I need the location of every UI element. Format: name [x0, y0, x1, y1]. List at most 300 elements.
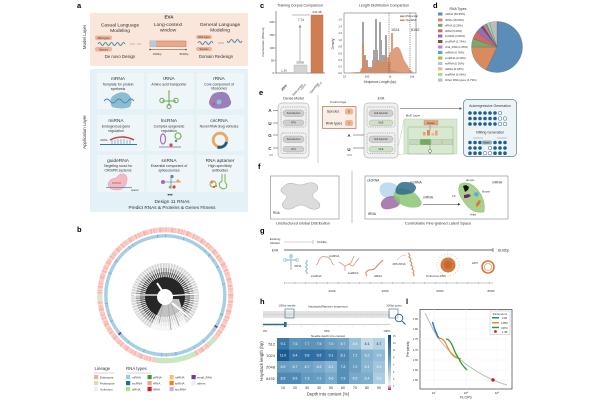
legend: RNA types: snRNA	[175, 382, 185, 386]
icon labels: HPV	[472, 261, 478, 265]
heatmap: 6.1	[365, 365, 369, 369]
generation panel: Infilling Generation	[476, 130, 504, 134]
EVA model diagram: EVA	[378, 96, 385, 100]
long-context window: window	[160, 28, 177, 34]
heatmap: 50	[329, 386, 333, 390]
panel label g: g	[260, 226, 265, 235]
EVA row: EVA	[272, 248, 279, 252]
heatmap: 6.7	[293, 365, 297, 369]
legend: RNA types: piRNA	[153, 376, 162, 380]
controllable latent space box: Human	[466, 178, 475, 182]
EVA model diagram: Self-Attention	[374, 112, 389, 115]
panel e: model architecture	[259, 88, 516, 163]
controllable latent space box: circRNA	[367, 178, 380, 182]
application layer panel	[90, 69, 248, 212]
card: miRNA	[100, 118, 137, 144]
long-context window: Long-context	[154, 22, 183, 28]
general language modeling: Species	[200, 48, 209, 51]
bar chart: training corpus comparison: v23.0	[299, 83, 307, 91]
heatmap: 5.9	[377, 354, 381, 358]
length axis: 6000	[437, 289, 444, 293]
panel c: corpus and length comparison	[260, 1, 419, 97]
card: RNA aptamer	[206, 158, 235, 189]
legend: Parameters	[493, 312, 508, 316]
MoE layer detail	[398, 114, 457, 155]
histogram: length distribution comparison: RNAcentral	[406, 15, 418, 18]
heatmap: 6.4	[365, 376, 369, 380]
existing models row: Models	[270, 241, 280, 245]
panel b: circular phylogeny	[77, 225, 231, 392]
panel label h: h	[260, 297, 265, 306]
bar chart: training corpus comparison: v15.0	[280, 84, 288, 92]
legend: circRNA (1.74%)	[445, 40, 466, 44]
histogram: length distribution comparison: 0.0	[338, 71, 343, 75]
bar chart: training corpus comparison: Training Corpus Comparison	[277, 4, 323, 8]
haystack schematic: 100bp query	[386, 304, 402, 308]
general language modeling: Modeling	[210, 28, 230, 34]
colorbar: 13	[393, 343, 396, 345]
model layer side label: Model Layer	[82, 24, 87, 49]
heatmap: 7.7	[305, 342, 309, 346]
poliovirus	[437, 254, 459, 276]
heatmap: 80	[365, 386, 369, 390]
length axis: 2000	[329, 289, 336, 293]
controllable latent space box	[365, 176, 508, 226]
HPV ring	[482, 261, 494, 273]
legend: lineage: Prokaryote	[100, 382, 115, 386]
legend: RNA Types	[450, 7, 467, 11]
histogram: length distribution comparison: Sequence Length (bp)	[364, 80, 396, 84]
card: guideRNA: Targeting scout for	[104, 164, 133, 168]
heatmap: 5.0	[377, 376, 381, 380]
casual language modeling	[95, 22, 141, 59]
EVA model diagram: U	[347, 147, 351, 152]
existing models row: Existing	[270, 237, 281, 241]
heatmap: 7.0	[329, 342, 333, 346]
histogram: length distribution comparison: 1.4	[338, 24, 343, 28]
heatmap: 6.7	[341, 342, 345, 346]
histogram: length distribution comparison: 0.2	[338, 64, 343, 68]
legend: mRNA (56.96%)	[445, 12, 465, 16]
EVA model diagram: MoE	[379, 149, 384, 151]
dense model diagram: C	[268, 146, 272, 151]
dense model diagram: A	[268, 108, 272, 113]
control tags box: T	[348, 121, 350, 125]
bar chart: training corpus comparison: v1.0	[316, 81, 323, 88]
card: guideRNA: CRISPR systems	[104, 168, 132, 172]
card: guideRNA	[104, 158, 139, 192]
casual language modeling: RNA types	[98, 37, 110, 40]
length axis: 4000	[382, 289, 389, 293]
legend: miRNA (0.78%)	[445, 50, 464, 54]
card: circRNA: Novel RNA drug vehicles	[200, 124, 239, 128]
card backgrounds	[97, 73, 244, 192]
histogram: length distribution comparison: 10k	[410, 74, 415, 78]
dense model diagram: Dense Model	[283, 96, 304, 100]
legend: scaRNA (0.06%)	[445, 72, 466, 76]
bar chart: training corpus comparison: 0	[272, 71, 274, 75]
depth slider: 0%	[263, 329, 268, 333]
card: miRNA: miRNA	[108, 118, 124, 124]
icon labels: vtRNA	[374, 274, 382, 278]
colorbar	[388, 335, 396, 390]
legend: lineage: Unknown	[100, 388, 113, 392]
legend: snoRNA (0.39%)	[445, 56, 466, 60]
legend: Other RNA types (4.79%)	[445, 78, 477, 82]
bar chart: training corpus comparison: OpenRNA	[309, 82, 320, 94]
panel label a: a	[77, 1, 82, 10]
colorbar: 7	[393, 365, 395, 367]
panel label b: b	[77, 225, 82, 234]
controllable latent space box: tRNA	[368, 212, 377, 216]
histogram: length distribution comparison: 8192	[411, 28, 419, 32]
depth slider: 50%	[324, 329, 330, 333]
card: lncRNA: Complex epigenetic	[154, 124, 185, 128]
heatmap: 6.1	[329, 365, 333, 369]
divider	[317, 95, 319, 163]
panel l: perplexity vs FLOPs	[406, 297, 512, 400]
control tags box: Control tags	[330, 100, 347, 104]
existing models row: 1024bp	[317, 240, 327, 244]
card: tRNA: Amino acid transporter	[151, 82, 187, 86]
legend	[438, 7, 477, 82]
haystack schematic: 100bp needle	[279, 304, 296, 308]
MoE layer detail: Router	[427, 122, 435, 125]
legend: RNA types	[126, 366, 212, 392]
legend: RNA types: snoRNA	[175, 388, 186, 392]
heatmap: 8.5	[293, 376, 297, 380]
histogram: length distribution comparison: 1024	[391, 28, 399, 32]
infilling token rows	[470, 142, 510, 153]
legend	[490, 311, 510, 334]
controllable latent space box: mRNA	[492, 180, 503, 184]
arrow	[423, 203, 458, 205]
generation panel: Autoregressive Generation	[469, 104, 511, 108]
series 1.4B point	[491, 378, 495, 382]
heatmap: 7.2	[317, 376, 321, 380]
bar chart: training corpus comparison: 1.26	[281, 68, 287, 72]
heatmap	[259, 334, 385, 396]
legend: RNA types: small_RNA	[197, 376, 212, 380]
card: guideRNA: guideRNA	[107, 158, 130, 164]
legend: lineage: Eukaryote	[100, 376, 114, 380]
legend: lineage	[94, 366, 115, 392]
heatmap: 11.0	[280, 354, 286, 358]
heatmap: 7.3	[305, 376, 309, 380]
heatmap: 1024	[266, 353, 276, 358]
card: miRNA: mRNA	[100, 138, 108, 142]
EVA model diagram: MoE	[379, 123, 384, 125]
generation panel	[464, 100, 516, 156]
dense model diagram: Self-Attention	[287, 112, 301, 115]
scatter plot frame: 1.60	[413, 368, 419, 372]
pie chart	[471, 21, 522, 72]
dense model diagram: Self-Attention	[287, 138, 301, 141]
legend: lncRNA (3.80%)	[445, 34, 465, 38]
legend: RNA types: miRNA	[175, 376, 184, 380]
controllable latent space box: Mouse	[482, 190, 490, 194]
series 437M	[446, 339, 467, 370]
card: lncRNA: lncRNA	[161, 118, 178, 124]
bar chart: training corpus comparison: 231.38	[312, 10, 322, 14]
long-context window: 8192bp	[180, 52, 189, 56]
colorbar: 1	[393, 386, 395, 388]
bar chart: training corpus comparison: Nucleotides (Billions)	[261, 28, 265, 56]
legend: lineage: Lineage	[94, 366, 111, 371]
heatmap: 9.1	[329, 354, 333, 358]
legend: 145M	[501, 321, 508, 325]
card: mRNA: Template for protein	[103, 82, 134, 86]
dense model diagram: FFN	[291, 123, 296, 125]
card: rRNA	[204, 76, 234, 109]
icon labels: scaRNA	[348, 271, 358, 275]
card: snRNA	[151, 158, 187, 189]
heatmap: 8.1	[341, 354, 345, 358]
bar chart: training corpus comparison: Rfam	[280, 83, 288, 91]
icon labels	[295, 254, 478, 278]
scatter plot frame	[406, 309, 512, 400]
card: snRNA: snRNA	[161, 158, 177, 164]
heatmap: Depth into context (%)	[307, 392, 350, 396]
EVA row: 8192bp	[498, 248, 509, 252]
histogram: length distribution comparison: 0.6	[338, 52, 343, 56]
legend: 437M	[501, 326, 508, 330]
divider	[351, 171, 353, 223]
length axis	[284, 283, 495, 293]
heatmap: 512	[268, 342, 276, 346]
heatmap: 8192	[266, 376, 276, 381]
panel g: length scale	[260, 226, 509, 293]
panel label f: f	[258, 162, 261, 171]
dense model diagram	[268, 96, 309, 158]
legend: snRNA (0.36%)	[445, 62, 464, 66]
existing models row	[270, 237, 327, 245]
legend: piRNA (0.18%)	[445, 67, 464, 71]
card: RNA aptamer: antibodies	[212, 168, 228, 172]
icon labels: Poliovirus RNA	[426, 274, 446, 278]
general language modeling: Domain Redesign	[199, 54, 234, 59]
controllable latent space box: Controllable Fine-grained Latent Space	[405, 222, 471, 226]
scatter plot frame: 1.85	[413, 317, 419, 321]
heatmap: 7.0	[353, 365, 357, 369]
global distribution box	[270, 176, 339, 226]
heatmap: 6.5	[353, 376, 357, 380]
histogram: length distribution comparison: 100	[365, 74, 370, 78]
controllable latent space box: lncRNA	[410, 180, 422, 184]
EVA model diagram	[347, 96, 398, 158]
heatmap: 9.4	[293, 354, 297, 358]
design summary text: Design 11 RNAs	[154, 199, 190, 205]
colorbar: 9	[393, 358, 395, 360]
heatmap: 7.5	[317, 342, 321, 346]
application layer side label: Application Layer	[82, 115, 87, 149]
histogram: length distribution comparison: 10	[343, 74, 346, 78]
casual language modeling: Casual Language	[101, 22, 139, 28]
ellipsis: •••	[167, 192, 173, 198]
heatmap: 6.9	[281, 365, 285, 369]
haystack schematic	[263, 304, 406, 324]
card: snRNA: Essential component of	[151, 164, 187, 168]
card: RNA aptamer: High-specificity	[208, 164, 232, 168]
heatmap: 30	[305, 386, 309, 390]
panel a: model and application layers	[77, 1, 248, 212]
histogram: length distribution comparison: 1k	[389, 74, 392, 78]
heatmap: 20	[293, 386, 297, 390]
RNA length icons	[284, 253, 414, 276]
heatmap: 8.5	[281, 376, 285, 380]
card: circRNA: circRNA	[210, 118, 229, 124]
heatmap: 6.6	[329, 376, 333, 380]
casual language modeling: Modeling	[110, 28, 130, 34]
histogram: length distribution comparison: Length Distribution Comparison	[359, 4, 409, 8]
histogram: length distribution comparison: OpenRNA	[406, 19, 417, 22]
histogram: length distribution comparison: 1.0	[338, 38, 343, 42]
heatmap: 70	[353, 386, 357, 390]
legend: RNA types: siRNA	[132, 388, 141, 392]
card: tRNA: tRNA	[163, 76, 176, 82]
scatter plot frame: 1.55	[413, 378, 419, 382]
EVA heading: EVA	[164, 14, 174, 20]
bar chart: training corpus comparison	[261, 4, 325, 97]
colorbar: 3	[393, 379, 395, 381]
histogram: length distribution comparison: Density	[331, 38, 335, 49]
card: circRNA	[200, 118, 239, 147]
general language modeling: RNA types	[198, 36, 211, 39]
heatmap: Needle depth into context	[311, 334, 345, 338]
scatter plot frame: 1.70	[413, 348, 419, 352]
card: mRNA: synthesis	[111, 87, 126, 91]
length axis: 8000	[488, 289, 495, 293]
panel f: latent space	[258, 162, 508, 226]
arrow to generation panel	[400, 107, 462, 110]
scatter plot frame: 10⁷	[432, 391, 436, 395]
depth slider: 100%	[383, 329, 391, 333]
panel label d: d	[433, 1, 438, 10]
heatmap: 9.5	[317, 354, 321, 358]
long-context window	[149, 22, 189, 56]
control tags box	[322, 100, 356, 128]
scatter plot frame: 1.65	[413, 358, 419, 362]
histogram: length distribution comparison	[331, 4, 419, 84]
dense model diagram: U	[268, 121, 272, 126]
autoregressive token rows	[470, 113, 498, 124]
heatmap: 7.6	[293, 342, 297, 346]
general language modeling	[196, 22, 242, 59]
controllable latent space box: mRNA	[423, 196, 434, 200]
legend: RNA types: rRNA	[153, 382, 160, 386]
legend: RNA types: lncRNA	[132, 382, 142, 386]
colorbar: 5	[393, 372, 395, 374]
heatmap: 10	[281, 386, 285, 390]
radial tree blob	[123, 255, 207, 342]
heatmap: 4.7	[377, 342, 381, 346]
scatter plot frame: 10⁸	[464, 391, 469, 395]
card: RNA aptamer: RNA aptamer	[206, 158, 235, 164]
species leaf	[459, 183, 484, 212]
icon labels: circRNA	[329, 254, 339, 258]
heatmap: 9.8	[305, 354, 309, 358]
card: guideRNA: spacer	[131, 188, 139, 192]
EVA model diagram: A	[347, 133, 351, 138]
scatter plot frame: 1.80	[413, 327, 419, 331]
colorbar: 11	[393, 350, 396, 352]
haystack schematic: Haystack(Random sequence)	[308, 304, 348, 308]
legend: viral_RNA (1.65%)	[445, 45, 468, 49]
heatmap: 6.7	[305, 365, 309, 369]
scatter plot frame: Perplexity	[406, 341, 410, 357]
series 21M	[432, 322, 439, 338]
panel label l: l	[406, 297, 408, 306]
heatmap: 5.4	[377, 365, 381, 369]
panel label e: e	[259, 88, 263, 97]
scatter plot frame: FLOPs	[460, 396, 472, 400]
heatmap: 7.8	[341, 365, 345, 369]
bar chart: training corpus comparison: 200	[270, 20, 275, 24]
legend: RNA types: mRNA	[132, 376, 141, 380]
inner RNA type ring	[106, 236, 225, 355]
panel d: RNA types pie	[433, 1, 522, 82]
heatmap: 6.2	[365, 354, 369, 358]
legend: 21M	[502, 316, 507, 320]
depth slider	[263, 322, 391, 333]
controllable latent space box: Fly	[452, 194, 456, 198]
icon labels: tRNA	[295, 264, 302, 268]
legend: RNA types: tRNA	[153, 388, 160, 392]
card: rRNA: Core component of	[204, 82, 234, 86]
card: rRNA: rRNA	[213, 76, 226, 82]
icon labels: snoRNA	[311, 274, 321, 278]
legend: rRNA (18.09%)	[445, 18, 464, 22]
series 145M	[439, 338, 461, 358]
heatmap: 4.1	[365, 342, 369, 346]
general language modeling: General Language	[200, 22, 241, 28]
heatmap: 90	[377, 386, 381, 390]
card: miRNA: Endogenous gene	[102, 124, 130, 128]
bar chart: training corpus comparison: 100	[270, 46, 275, 50]
fitness summary text: Predict RNAs & Proteins & Genes Fitness	[128, 205, 216, 210]
dense model diagram: G	[268, 133, 272, 138]
colorbar: 15	[393, 336, 396, 338]
card: lncRNA: regulation	[161, 129, 177, 133]
dense model diagram: FFN	[291, 149, 296, 151]
scatter plot frame: 10⁹	[495, 391, 500, 395]
MoE layer detail: MoE Layer	[406, 114, 420, 118]
card: rRNA: ribosomes	[211, 86, 227, 90]
heatmap: 9.1	[281, 342, 285, 346]
bar chart: training corpus comparison: 50	[271, 59, 274, 63]
icon labels: 28S rRNA	[392, 262, 406, 266]
heatmap: 5.5	[353, 342, 357, 346]
card: mRNA	[103, 76, 134, 108]
global distribution box: RNA	[273, 211, 281, 215]
heatmap: 60	[341, 386, 345, 390]
bar chart: training corpus comparison: 7.7x	[298, 18, 304, 22]
generation panel: Mask	[484, 141, 490, 144]
fitted curve	[425, 313, 507, 385]
card: miRNA: regulation	[108, 129, 124, 133]
heatmap: 7.1	[353, 354, 357, 358]
heatmap: Haystack length (bp)	[259, 341, 264, 381]
card: snRNA: spliceosomes	[158, 168, 180, 172]
bar chart: training corpus comparison: RNAcentral	[292, 83, 304, 97]
histogram: length distribution comparison: 0.8	[338, 44, 343, 48]
heatmap: 6.5	[317, 365, 321, 369]
panel h: needle in haystack	[259, 297, 406, 396]
casual language modeling: De novo Design	[105, 54, 136, 59]
legend: RNA types: others	[197, 382, 206, 386]
panel label c: c	[260, 1, 264, 10]
long-context window: 1024bp	[153, 52, 162, 56]
